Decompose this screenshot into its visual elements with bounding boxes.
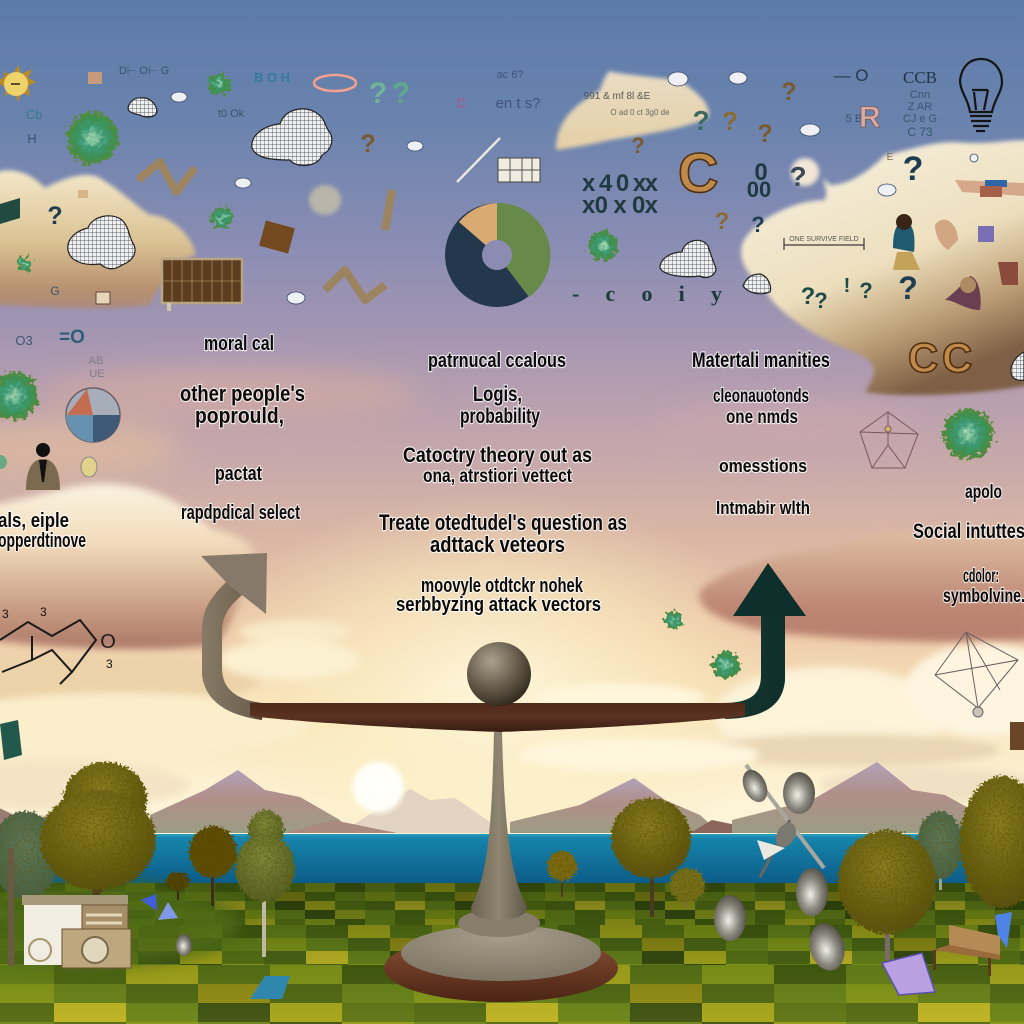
floating question marks: ? xyxy=(715,208,729,235)
text column: right: apolo xyxy=(965,482,1002,503)
text column: left: als, eiple xyxy=(0,510,69,532)
text column: centre: Treate otedtudel's question as xyxy=(379,510,627,535)
network diagram: lower right xyxy=(935,632,1018,717)
math glyphs: x0 x 0x xyxy=(582,192,659,219)
sketchy cloud fragment xyxy=(309,185,341,215)
text column: centre: patrnucal ccalous xyxy=(428,350,566,372)
tree: tiny left xyxy=(166,872,190,900)
tree: far left pale xyxy=(0,811,59,899)
math glyphs: 0 xyxy=(754,159,768,186)
letter glyph fragments: Cb xyxy=(26,107,42,122)
balance beam xyxy=(250,703,745,732)
molecule diagram xyxy=(0,605,113,684)
letter glyph fragments: AB xyxy=(89,355,103,367)
sun icon xyxy=(0,65,36,102)
text column: right: omesstions xyxy=(719,456,807,476)
text column: centre: probability xyxy=(460,405,540,428)
tree: small dark xyxy=(189,826,237,906)
small blue prisms xyxy=(141,894,1012,956)
distant mountains xyxy=(0,762,990,833)
letter glyph fragments: 991 & mf 8l &E xyxy=(584,91,651,102)
purple crystal xyxy=(882,953,935,995)
network diagram: upper right xyxy=(860,412,918,468)
letter glyph fragments: Cnn xyxy=(910,89,930,101)
tree: right cluster xyxy=(838,830,936,960)
large brown C letters xyxy=(678,101,972,381)
floating question marks: ? xyxy=(722,106,738,136)
letter glyph fragments: C 73 xyxy=(907,125,933,139)
molecule diagram: 3 xyxy=(106,657,113,671)
text column: right: one nmds xyxy=(726,407,798,428)
math glyphs: 00 xyxy=(747,177,771,202)
letter glyph fragments: en t s? xyxy=(495,95,541,112)
letter glyph fragments: O xyxy=(100,631,116,653)
floating question marks: ? xyxy=(859,278,873,303)
sphere on beam xyxy=(467,642,531,706)
letter glyph fragments: CJ e G xyxy=(903,113,937,125)
checkered ground xyxy=(0,883,1024,1024)
central warm glow xyxy=(190,490,790,890)
text column: centre: moovyle otdtckr nohek xyxy=(421,575,584,597)
text column: centre: Catoctry theory out as xyxy=(403,444,592,467)
letter glyph fragments: E xyxy=(887,152,894,163)
solar panel xyxy=(162,259,242,311)
floating question marks: ? xyxy=(757,120,773,148)
word fragment: - c o i y xyxy=(572,281,722,306)
math glyphs xyxy=(582,159,771,219)
floating question marks: ? xyxy=(692,105,710,136)
text column: right xyxy=(692,349,1024,607)
text column: left: other people's xyxy=(180,381,305,406)
molecule diagram: 3 xyxy=(40,605,47,619)
letter glyph fragments: Z AR xyxy=(908,101,932,113)
tiles and pencil xyxy=(0,72,1024,760)
cloud: upper left xyxy=(0,170,196,308)
jointed tan figures xyxy=(138,162,392,300)
cloud: upper centre xyxy=(556,71,709,150)
bench xyxy=(933,925,1000,976)
floating question marks: ? xyxy=(903,150,923,188)
tree: small centre right xyxy=(547,851,577,897)
letter glyph fragments xyxy=(15,65,937,653)
text column: centre: adttack veteors xyxy=(430,532,565,557)
cloud: mid left bank xyxy=(0,484,254,649)
horizon clouds xyxy=(0,620,1024,810)
molecule diagram: 3 xyxy=(2,607,9,621)
letter glyph fragments: t0 Ok xyxy=(218,108,245,120)
radio cabinet xyxy=(8,848,131,968)
large brown C letters: R xyxy=(859,101,881,134)
text column: centre: Logis, xyxy=(473,383,522,406)
text column: centre xyxy=(379,350,627,616)
letter glyph fragments: B O H xyxy=(254,70,290,85)
text column: right: Matertali manities xyxy=(692,349,830,372)
floating question marks: ? xyxy=(814,288,828,313)
sky haze band xyxy=(0,369,920,480)
letter glyph fragments: H xyxy=(27,131,37,146)
green leaf clusters xyxy=(0,73,993,679)
cloud: right large xyxy=(741,140,1024,395)
letter glyph fragments: O ad 0 ct 3g0 de xyxy=(610,108,670,117)
tree: right pale xyxy=(917,811,963,890)
text column: centre: serbbyzing attack vectors xyxy=(396,594,601,616)
letter glyph fragments: UE xyxy=(89,368,105,380)
balance stand xyxy=(384,732,618,1002)
brown mosaic tile xyxy=(259,221,295,253)
letter glyph fragments: D⊢ O⊢ G xyxy=(119,65,169,77)
floating question marks: ? xyxy=(789,161,807,192)
trees xyxy=(0,762,1024,960)
tree: right edge xyxy=(960,776,1024,908)
math glyphs: x 4 0 xx xyxy=(582,170,659,197)
tree: large left xyxy=(40,762,156,900)
people vignettes in right cloud xyxy=(784,180,1024,310)
text column: right: cleonauotonds xyxy=(713,386,809,407)
sun xyxy=(348,757,408,817)
floating question marks: ? xyxy=(751,212,765,237)
letter glyph fragments: =O xyxy=(59,327,85,348)
floating question marks: ? xyxy=(47,202,63,230)
text column: left xyxy=(0,333,305,552)
floating question marks: ! xyxy=(844,275,850,297)
floating question marks: ? xyxy=(360,130,376,158)
businessman icon xyxy=(0,443,97,490)
letter glyph fragments: O3 xyxy=(15,333,33,348)
text column: centre: ona, atrstiori vettect xyxy=(423,466,573,487)
letter glyph fragments: 5 xyxy=(100,294,106,306)
text column: left: opperdtinove xyxy=(0,530,86,552)
floating question marks: ? xyxy=(898,270,918,306)
letter glyph fragments: 5 B xyxy=(846,113,862,125)
small pie chart left xyxy=(66,388,120,442)
large brown C letters: C xyxy=(678,141,718,204)
pie chart xyxy=(445,203,550,307)
tree: mid xyxy=(611,798,691,917)
floating question marks: ? xyxy=(369,77,387,110)
floating question marks: ? xyxy=(801,283,815,310)
mesh clouds xyxy=(68,98,1024,380)
left curved arrow xyxy=(201,553,267,720)
people vignettes in right cloud: ONE SURVIVE FIELD xyxy=(789,236,859,243)
text column: left: moral cal xyxy=(204,333,274,355)
text column: left: rapdpdical select xyxy=(181,502,300,524)
text column: left: pactat xyxy=(215,463,262,485)
floating question marks: ? xyxy=(781,78,797,106)
letter glyph fragments: CCB xyxy=(903,68,937,87)
small white clouds xyxy=(171,72,978,304)
tree: mid small xyxy=(669,868,705,907)
letter glyph fragments: c xyxy=(456,92,466,112)
large brown C letters: C xyxy=(942,334,972,381)
letter glyph fragments: G xyxy=(50,284,60,298)
lake xyxy=(0,834,1024,884)
text column: left: poprould, xyxy=(195,403,284,428)
floating question marks: ? xyxy=(631,133,645,158)
cloud: mid right bank xyxy=(699,528,1024,642)
silver droplets and crossed tool xyxy=(714,765,850,975)
letter glyph fragments: — O xyxy=(834,66,868,85)
floating question marks: ? xyxy=(392,77,410,110)
large brown C letters: C xyxy=(908,334,938,381)
letter glyph fragments: ac 6? xyxy=(497,69,523,81)
lightbulb icon xyxy=(960,59,1002,131)
floating question marks xyxy=(47,77,923,313)
text column: right: Intmabir wlth xyxy=(716,498,810,518)
right upward arrow xyxy=(722,563,806,719)
tree: tall slim xyxy=(235,810,295,957)
glowing halo xyxy=(314,75,356,91)
